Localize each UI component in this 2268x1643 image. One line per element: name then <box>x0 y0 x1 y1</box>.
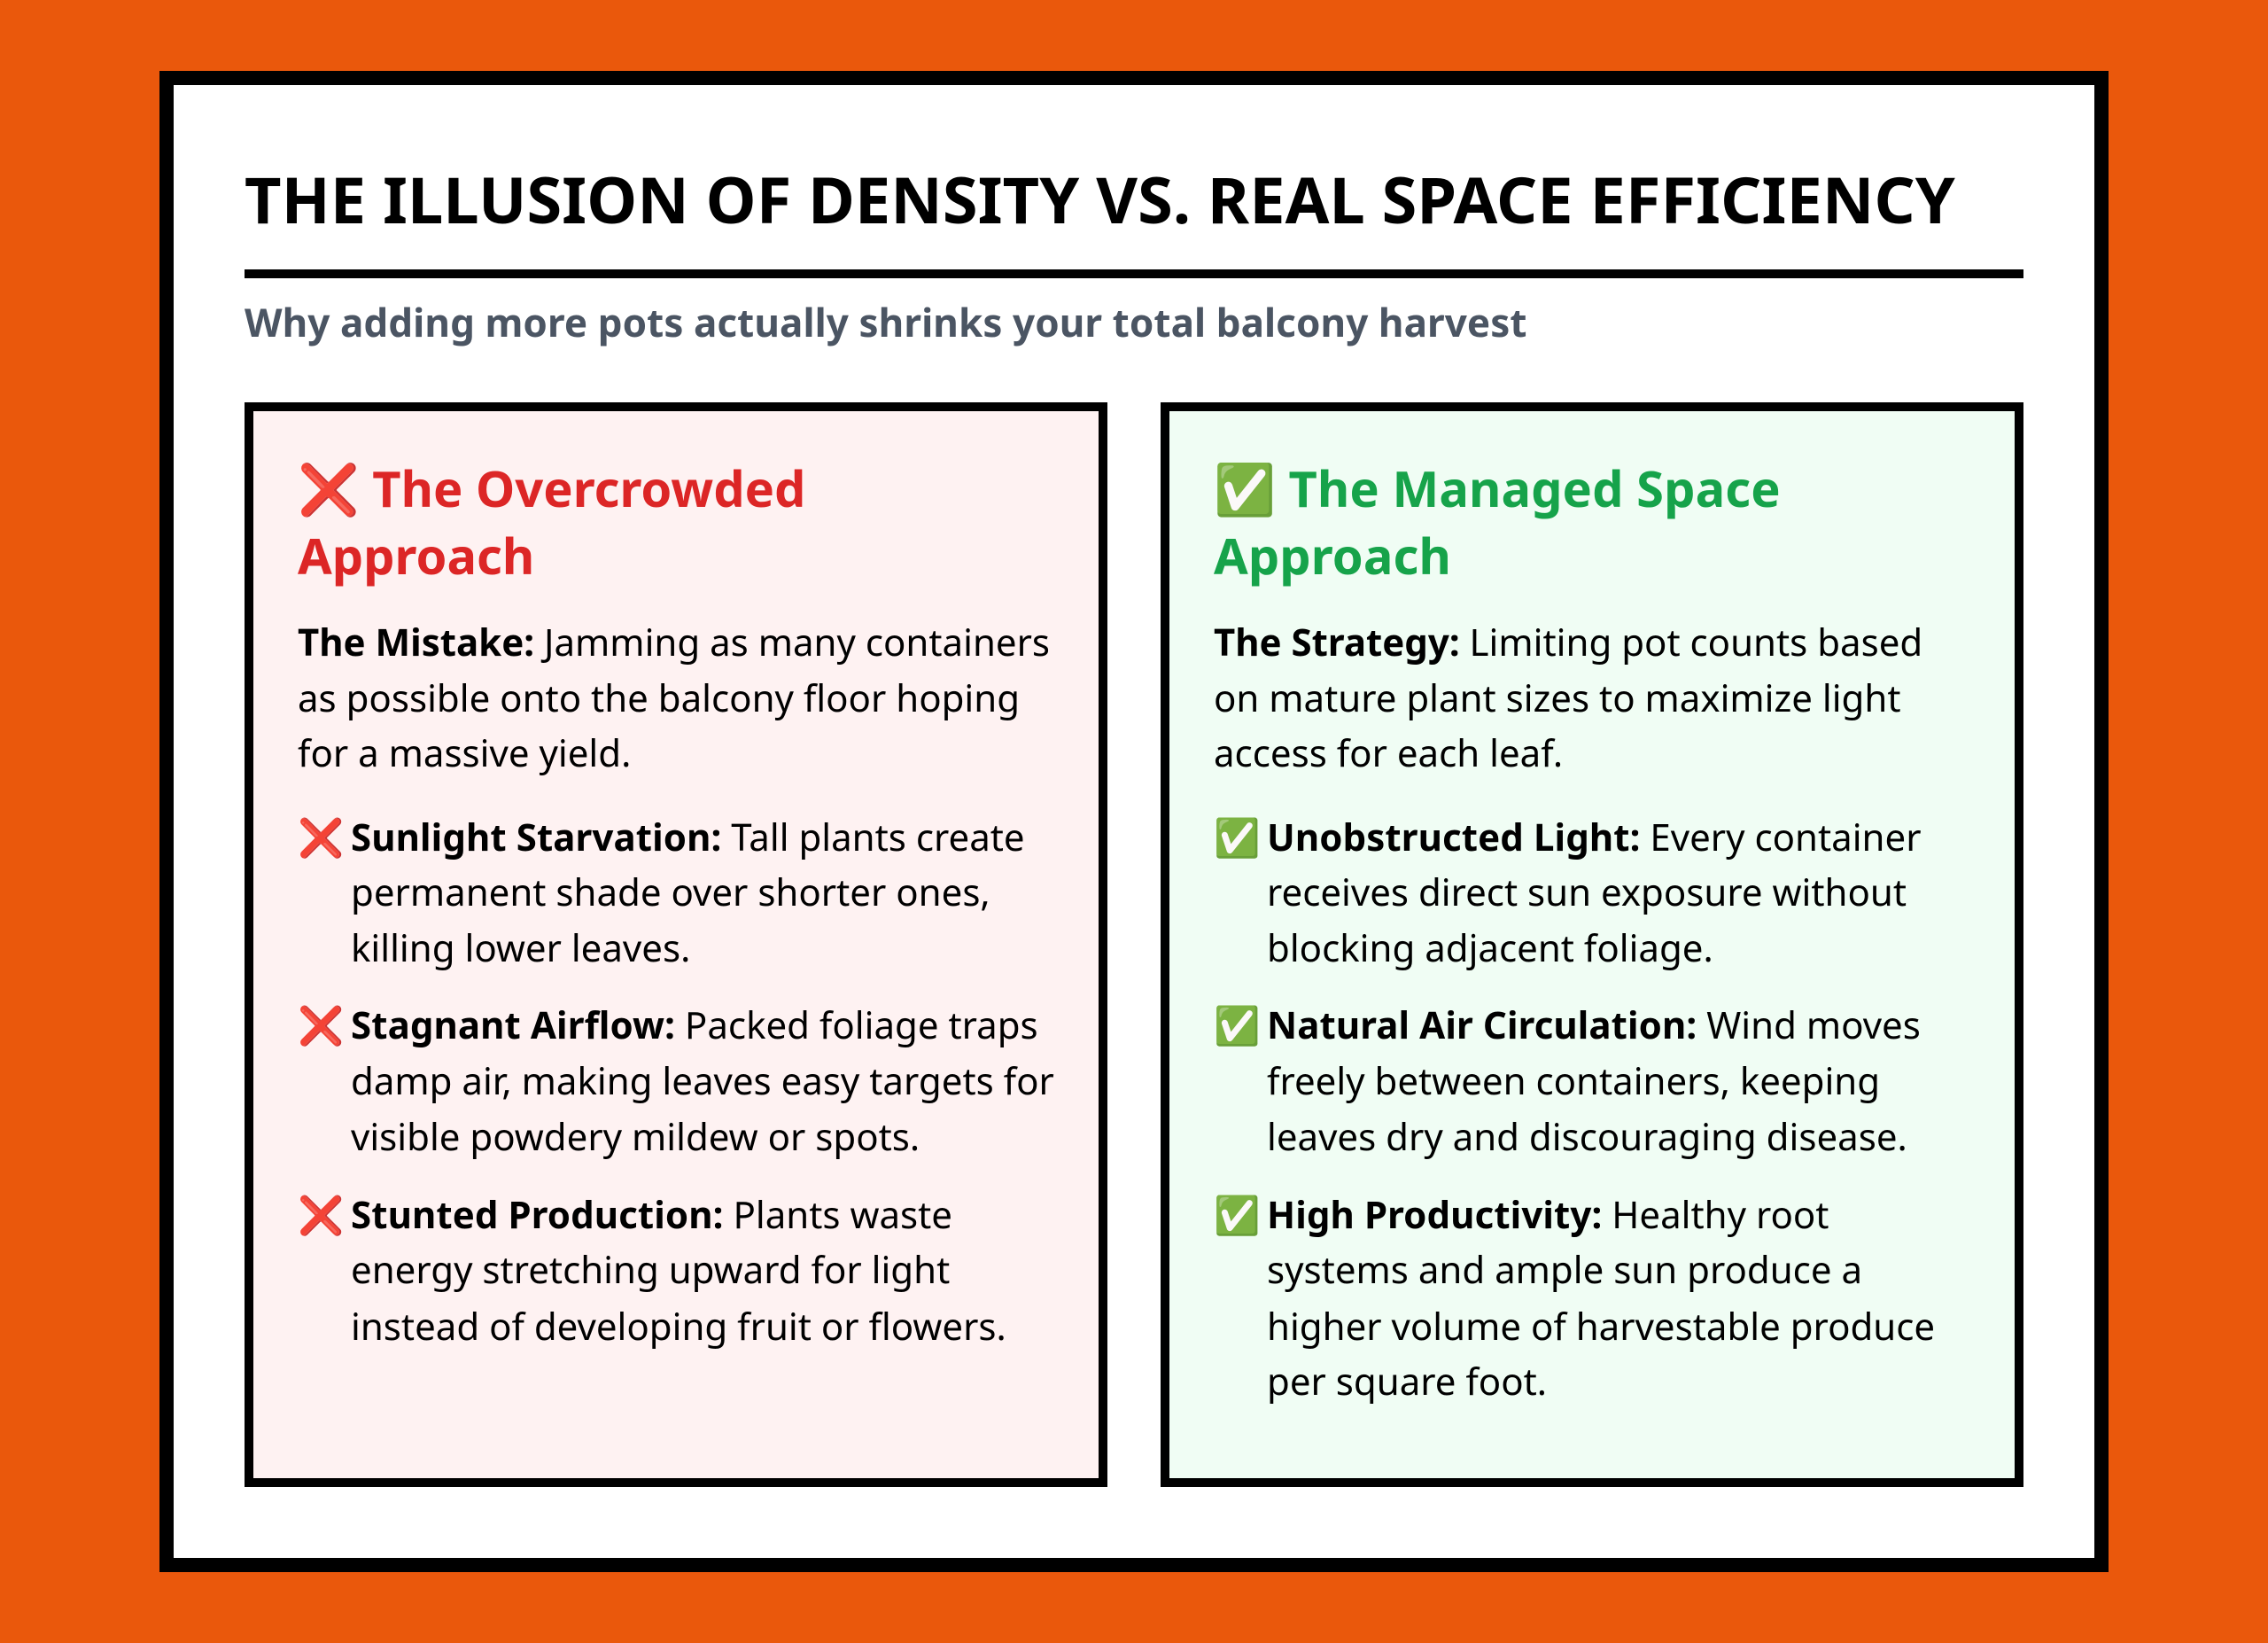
heading: managed space: ✅ The Managed Space <box>1214 455 1781 522</box>
text: the strategy <box>1214 617 1922 778</box>
panel: overcrowded approach <box>245 402 1107 1487</box>
item: high productivity: systems and ample sun produce a <box>1267 1244 1862 1295</box>
item: natural air circulation: freely between containers, keeping <box>1267 1055 1880 1106</box>
item: stagnant airflow: visible powdery mildew or spots. <box>351 1111 920 1162</box>
item: stunted production: Stunted Production: Plants waste <box>351 1189 952 1240</box>
text: the strategy: access for each leaf. <box>1214 728 1563 778</box>
item: natural air circulation <box>1214 1000 1921 1162</box>
heading: managed space <box>1214 455 1781 589</box>
item: stunted production: energy stretching upward for light <box>351 1244 950 1295</box>
item: high productivity: higher volume of harvestable produce <box>1267 1301 1935 1351</box>
text: the strategy: The Strategy: Limiting pot counts based <box>1214 617 1922 667</box>
title: THE ILLUSION OF DENSITY VS. REAL SPACE EFFICIENCY <box>245 156 1955 243</box>
item: high productivity: ✅ <box>1214 1189 1260 1240</box>
item: high productivity: High Productivity: Healthy root <box>1267 1189 1829 1240</box>
item: unobstructed light: Unobstructed Light: Every container <box>1267 812 1922 862</box>
item: stunted production: ❌ <box>298 1189 344 1240</box>
heading: overcrowded <box>298 455 805 589</box>
item: stagnant airflow: ❌ <box>298 1000 344 1050</box>
subtitle: Why adding more pots actually shrinks your total balcony harvest <box>245 295 1527 348</box>
item: sunlight starvation: permanent shade over shorter ones, <box>351 867 990 917</box>
text: the mistake <box>298 617 1050 778</box>
item: high productivity <box>1214 1189 1935 1406</box>
item: stagnant airflow <box>298 1000 1054 1162</box>
heading: overcrowded: Approach <box>298 522 534 589</box>
item: stagnant airflow: Stagnant Airflow: Packed foliage traps <box>351 1000 1038 1050</box>
outer frame <box>159 71 2109 1572</box>
text: the mistake: as possible onto the balcony floor hoping <box>298 673 1020 723</box>
item: unobstructed light: ✅ <box>1214 812 1260 862</box>
item: stagnant airflow: damp air, making leaves easy targets for <box>351 1055 1054 1106</box>
item: sunlight starvation: ❌ <box>298 812 344 862</box>
item: natural air circulation: ✅ <box>1214 1000 1260 1050</box>
item: unobstructed light: blocking adjacent foliage. <box>1267 923 1713 973</box>
item: sunlight starvation: killing lower leaves. <box>351 923 690 973</box>
text: the mistake: The Mistake: Jamming as many containers <box>298 617 1050 667</box>
item: natural air circulation: leaves dry and discouraging disease. <box>1267 1111 1907 1162</box>
item: stunted production <box>298 1189 1006 1351</box>
heading: overcrowded: ❌ The Overcrowded <box>298 455 805 522</box>
item: unobstructed light <box>1214 812 1922 973</box>
item: natural air circulation: Natural Air Circulation: Wind moves <box>1267 1000 1921 1050</box>
text: the mistake: for a massive yield. <box>298 728 631 778</box>
text: the strategy: on mature plant sizes to maximize light <box>1214 673 1901 723</box>
heading: managed space: Approach <box>1214 522 1451 589</box>
item: stunted production: instead of developing fruit or flowers. <box>351 1301 1006 1351</box>
item: sunlight starvation: Sunlight Starvation: Tall plants create <box>351 812 1025 862</box>
item: sunlight starvation <box>298 812 1025 973</box>
item: high productivity: per square foot. <box>1267 1356 1547 1406</box>
item: unobstructed light: receives direct sun exposure without <box>1267 867 1907 917</box>
panel: managed space approach <box>1161 402 2023 1487</box>
